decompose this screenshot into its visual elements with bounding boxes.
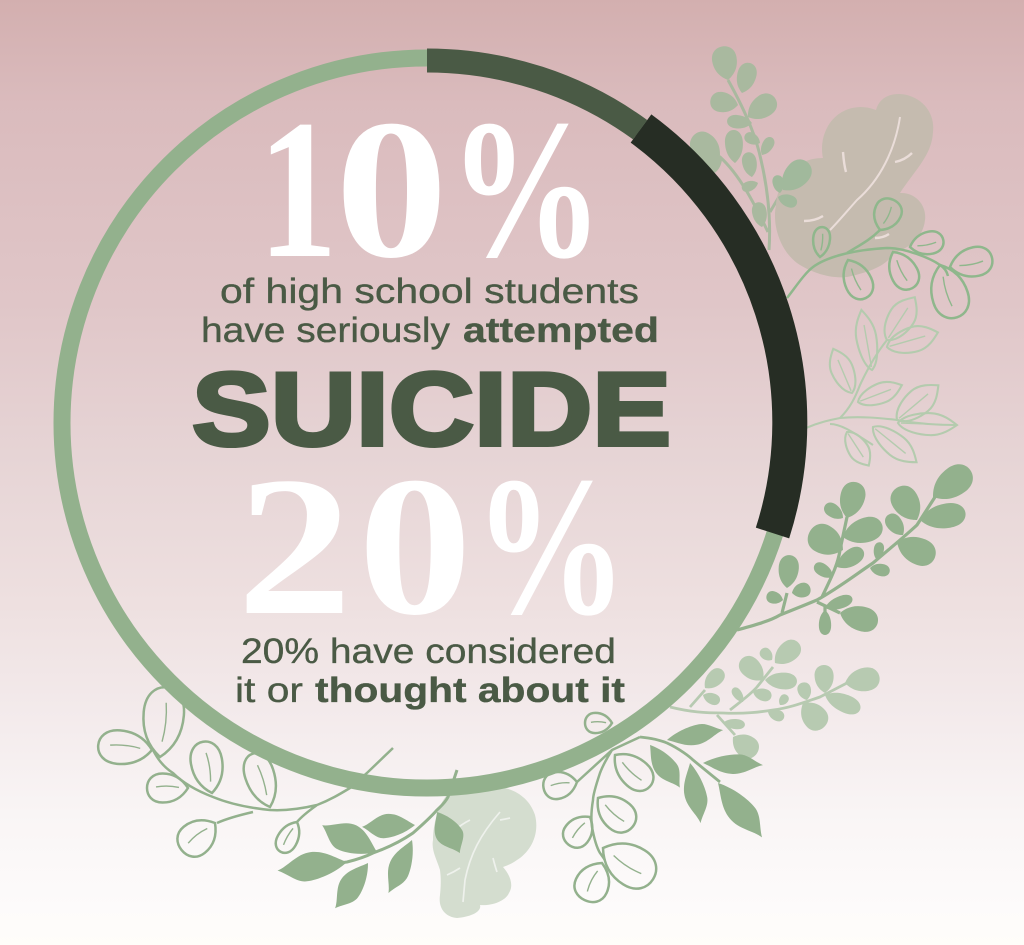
progress ring: green base: [62, 58, 792, 788]
progress ring: 10 percent segment: [427, 60, 640, 130]
big number: 10%: [258, 78, 603, 300]
big number: 10%: 1: [258, 78, 338, 299]
big number: 20%: [237, 435, 627, 657]
big number: 10%: %: [449, 78, 603, 300]
foliage: outlined round-leaf branch bottom right: [541, 713, 664, 907]
foliage: pale green round-leaf branch: [670, 635, 882, 763]
text: of high school students have seriously attempted: have seriously: [201, 311, 451, 350]
text: of high school students have seriously attempted: of high school students: [220, 272, 639, 311]
text: 20% have considered it or thought about it: it or: [235, 671, 303, 710]
text: 20% have considered it or thought about it: thought about it: [315, 671, 625, 710]
heading: SUICIDE: SUICIDE: [192, 352, 671, 468]
foliage: top right filled sprig: [685, 44, 783, 250]
foliage: pale outlined pointed-leaf branch: [806, 290, 957, 471]
foliage: outlined round-leaf branch upper right: [787, 194, 995, 323]
foliage: beige leaf blob: [775, 94, 933, 277]
big number: 20%: 0: [358, 436, 472, 657]
text: of high school students have seriously attempted: [201, 272, 659, 350]
progress ring: 20 percent segment: [641, 128, 790, 533]
foliage: filled pointed-leaf branch lower right: [640, 720, 772, 846]
big number: 20%: 2: [237, 435, 352, 656]
text: of high school students have seriously attempted: attempted: [463, 311, 659, 350]
text: 20% have considered it or thought about it: [235, 632, 625, 710]
big number: 10%: 0: [335, 79, 448, 300]
big number: 20%: %: [474, 437, 627, 657]
foliage: filled green round-leaf branch right: [737, 458, 979, 635]
foliage: outlined round-leaf branch bottom left: [97, 686, 393, 863]
foliage: small green leaves over the blob: [771, 154, 817, 210]
text: 20% have considered it or thought about it: 20% have considered: [241, 632, 616, 671]
foliage: filled pointed-leaf branch bottom center: [276, 770, 471, 915]
foliage: pale leaf blob bottom: [433, 787, 536, 918]
